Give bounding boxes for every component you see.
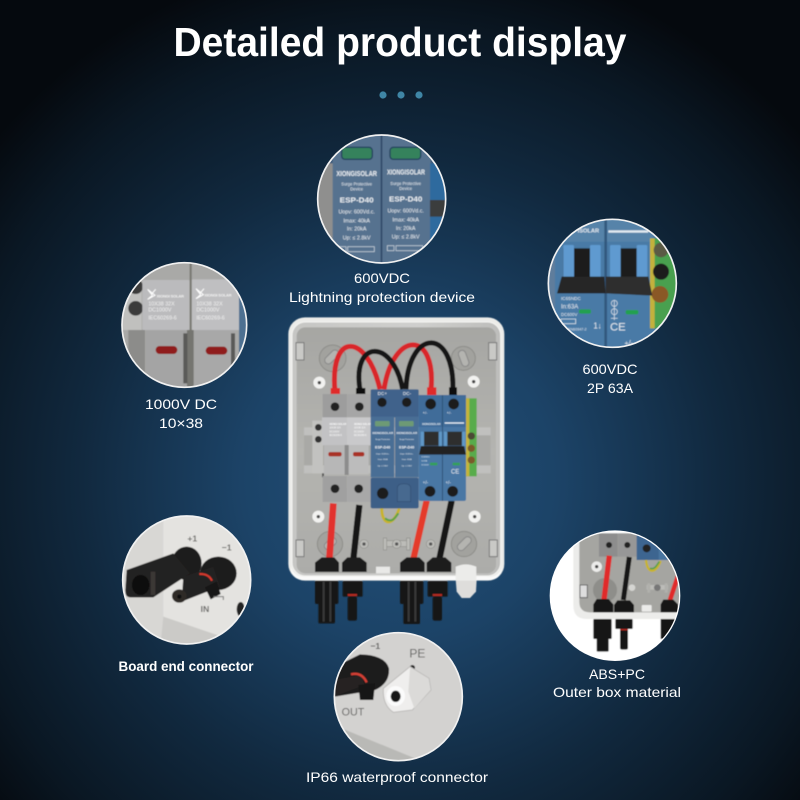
mounting holes (312, 376, 481, 523)
label: outer box material: ABS+PC (589, 666, 645, 682)
small bottom standoffs (360, 538, 435, 550)
circle: fuse holder detail: 10X38 32X (196, 301, 223, 307)
circle: surge protection detail: Surge Protective (390, 181, 422, 186)
circuit breaker: +/- (423, 410, 428, 415)
fuse holders: IEC60269-6 (329, 435, 342, 437)
label: breaker (582, 361, 638, 396)
fuse holders (322, 394, 371, 502)
cable glands (315, 557, 451, 572)
circuit breaker: In:63A (421, 460, 428, 463)
circle: fuse holder detail: DC1000V (148, 307, 172, 313)
fuse holders: DC1000V (354, 431, 365, 433)
box shell (288, 317, 504, 581)
circle: fuse holder detail: XIONGI SOLAR (204, 293, 232, 298)
green terminal (465, 398, 477, 476)
circle: waterproof connector detail: OUT (342, 707, 364, 719)
circle: fuse holder detail: DC1000V (196, 307, 220, 313)
fuse holders: DC1000V (329, 431, 340, 433)
cables (329, 343, 453, 559)
label: fuse: 1000V DC (145, 396, 217, 412)
circuit breaker: +/- (447, 410, 452, 415)
label: breaker: 600VDC (582, 361, 638, 377)
surge protection device (371, 389, 419, 508)
circuit breaker: DC600V (421, 465, 430, 467)
surge protection device: Up: ≤ 2.8kV (377, 465, 389, 468)
fuse holders: 10X38 32X (329, 428, 341, 430)
main product: combiner box (288, 317, 504, 624)
label: outer box material: Outer box material (553, 684, 681, 700)
circle: circuit breaker detail: +/- (624, 339, 634, 348)
surge protection device: Uopv: 600Vd.c. (400, 454, 414, 456)
circle: fuse holder detail: IEC60269-6 (196, 315, 225, 321)
circle: circuit breaker detail: ISOLAR (578, 228, 599, 234)
surge protection device: Surge Protective (375, 438, 391, 441)
circle: surge protection detail: Up: ≤ 2.8kV (392, 235, 420, 241)
label: breaker: 2P 63A (587, 380, 634, 396)
circle: circuit breaker detail: DC600V (561, 312, 577, 317)
surge protection device: DC+ (378, 391, 387, 396)
circle: outer box detail (550, 530, 680, 661)
surge protection device: XIONGISOLAR (372, 431, 394, 435)
label: lightning protection device: 600VDC (354, 270, 410, 286)
circle: surge protection detail: ESP-D40 (340, 198, 374, 205)
connectors below box (315, 579, 477, 624)
circle: board end connector detail: −1 (222, 543, 232, 553)
label: fuse: 10×38 (159, 415, 203, 431)
din rail (304, 427, 491, 473)
surge protection device: DC- (403, 391, 412, 396)
circle: surge protection detail: Surge Protective (341, 182, 373, 187)
circle: surge protection detail: Up: ≤ 2.8kV (343, 235, 371, 241)
circuit breaker (419, 395, 466, 501)
grey terminal block (312, 421, 323, 473)
surge protection device: Uopv: 600Vd.c. (376, 454, 390, 456)
pagination dots (379, 91, 423, 99)
circuit breaker: CE (451, 469, 459, 475)
surge protection device: ESP-D40 (375, 446, 390, 450)
circle: fuse holder detail: 10X38 32X (148, 301, 175, 307)
circle: waterproof connector detail: −1 (370, 641, 380, 651)
fuse holders: 10X38 32X (354, 428, 366, 430)
circle: waterproof connector detail (334, 632, 464, 762)
circle: surge protection detail: In: 20kA (347, 227, 367, 233)
circle: circuit breaker detail: In:63A (561, 305, 578, 311)
circle: surge protection detail (316, 134, 446, 264)
label: outer box material (553, 666, 681, 700)
circle: circuit breaker detail (548, 218, 678, 348)
surge protection device: Surge Protective (399, 438, 415, 441)
circle: surge protection detail: Device (399, 186, 413, 191)
circle: surge protection detail: XIONGISOLAR (387, 168, 425, 177)
circle: surge protection detail: Device (350, 187, 364, 192)
label: waterproof connector: IP66 waterproof connector (306, 769, 488, 785)
circle: fuse holder detail (121, 262, 248, 388)
label: board end connector: Board end connector (118, 658, 254, 674)
circle: board end connector detail (122, 515, 252, 645)
circle: surge protection detail: XIONGISOLAR (336, 169, 377, 178)
label: lightning protection device: Lightning protection device (289, 289, 475, 305)
circle: circuit breaker detail: CE (610, 321, 626, 333)
circle: surge protection detail: Uopv: 600Vd.c. (387, 208, 424, 214)
surge protection device: Imax: 40kA (402, 458, 412, 461)
circle: circuit breaker detail: IC65NDC (561, 296, 582, 301)
circle: circuit breaker detail: 1↓ (593, 321, 602, 330)
surge protection device: ESP-D40 (399, 446, 414, 450)
surge protection device: Up: ≤ 2.8kV (401, 465, 413, 468)
circle: surge protection detail: In: 20kA (396, 226, 416, 232)
circle: fuse holder detail: IEC60269-6 (148, 315, 177, 321)
circuit breaker: IC65NDC (421, 457, 430, 459)
circle: surge protection detail: Imax: 40kA (343, 219, 370, 225)
circle: board end connector detail: IN (201, 604, 209, 614)
label: fuse (145, 396, 217, 431)
circuit breaker: +/- (423, 480, 429, 485)
circle: surge protection detail: Uopv: 600Vd.c. (338, 209, 375, 215)
circle: waterproof connector detail: PE (409, 647, 425, 661)
circle: surge protection detail: ESP-D40 (389, 197, 422, 204)
label: lightning protection device (289, 270, 475, 305)
corner clips and bosses (296, 343, 497, 557)
circuit breaker: XIONGISOLAR (422, 422, 441, 426)
title: Detailed product display (174, 19, 627, 65)
surge protection device: Imax: 40kA (378, 458, 388, 461)
fuse holders: XIONGI SOLAR (329, 423, 347, 426)
surge protection device: XIONGISOLAR (396, 431, 418, 435)
fuse holders: XIONGI SOLAR (354, 423, 371, 426)
circle: board end connector detail: +1 (187, 533, 197, 543)
circle: circuit breaker detail: IEC/EN60947-2 (561, 327, 587, 331)
circuit breaker: +/- (445, 480, 451, 485)
fuse holders: IEC60269-6 (354, 435, 367, 437)
circle: surge protection detail: Imax: 40kA (392, 218, 419, 224)
circle: fuse holder detail: XIONGI SOLAR (157, 293, 184, 298)
